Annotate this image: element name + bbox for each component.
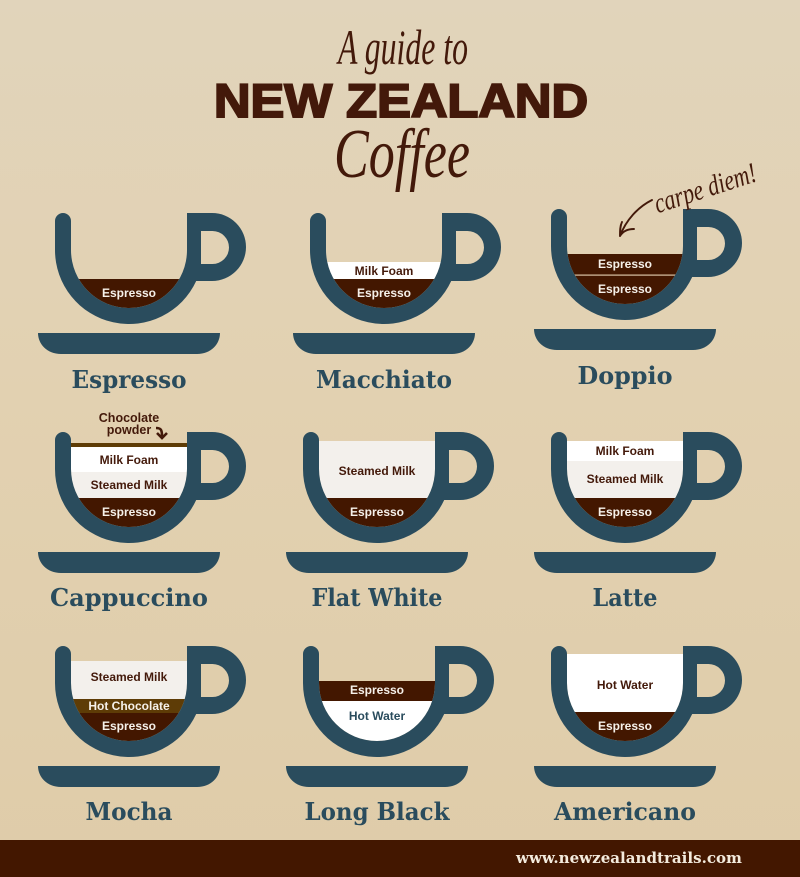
cup bbox=[551, 646, 742, 757]
cup bbox=[303, 432, 494, 543]
liquid layers bbox=[69, 443, 189, 530]
title script line: A guide to: A guide to bbox=[336, 21, 468, 76]
small arrow bbox=[156, 428, 167, 438]
drink: Long Black bbox=[286, 646, 494, 826]
title script line: Coffee: Coffee bbox=[334, 115, 470, 193]
drink: Latte bbox=[534, 432, 742, 612]
saucer bbox=[534, 552, 716, 573]
liquid layers bbox=[69, 661, 189, 744]
saucer bbox=[286, 766, 468, 787]
liquid layers bbox=[79, 279, 179, 308]
arrow bbox=[620, 200, 652, 236]
layer label: Milk Foam bbox=[355, 264, 413, 278]
cup bbox=[310, 213, 501, 324]
cup bbox=[55, 213, 246, 324]
drink name: Long Black bbox=[304, 797, 451, 826]
layer label: Steamed Milk bbox=[91, 670, 168, 684]
cup bbox=[551, 432, 742, 543]
layer label: Espresso bbox=[598, 719, 652, 733]
layer label: Milk Foam bbox=[596, 444, 654, 458]
drink name: Espresso bbox=[72, 365, 186, 394]
drink name: Americano bbox=[553, 797, 696, 826]
drink: Flat White bbox=[286, 432, 494, 612]
liquid layers bbox=[565, 654, 685, 744]
layer label: Espresso bbox=[350, 505, 404, 519]
saucer bbox=[38, 333, 220, 354]
layer label: Hot Chocolate bbox=[88, 699, 170, 713]
chocolate powder note: powder bbox=[107, 423, 151, 437]
layer label: Espresso bbox=[102, 505, 156, 519]
footer bbox=[0, 840, 800, 877]
drink: Mocha bbox=[38, 646, 246, 826]
title bbox=[214, 21, 588, 193]
saucer bbox=[38, 766, 220, 787]
liquid layers bbox=[317, 681, 437, 744]
footer bar bbox=[0, 840, 800, 877]
drink name: Mocha bbox=[86, 797, 172, 826]
liquid layers bbox=[565, 441, 685, 530]
cup bbox=[55, 432, 246, 543]
layer label: Espresso bbox=[350, 683, 404, 697]
liquid layers bbox=[328, 262, 440, 308]
layer label: Espresso bbox=[598, 282, 652, 296]
liquid layers bbox=[565, 254, 685, 307]
layer label: Milk Foam bbox=[100, 453, 158, 467]
saucer bbox=[286, 552, 468, 573]
drink name: Latte bbox=[592, 583, 658, 612]
layer label: Espresso bbox=[598, 257, 652, 271]
saucer bbox=[38, 552, 220, 573]
saucer bbox=[293, 333, 475, 354]
layer label: Espresso bbox=[102, 719, 156, 733]
layer label: Steamed Milk bbox=[339, 464, 416, 478]
drink: Cappuccino bbox=[38, 411, 246, 612]
layer label: Espresso bbox=[598, 505, 652, 519]
liquid layers bbox=[317, 441, 437, 530]
drink: Americano bbox=[534, 646, 742, 826]
drink name: Cappuccino bbox=[50, 583, 208, 612]
drink: Macchiato bbox=[293, 213, 501, 394]
saucer bbox=[534, 329, 716, 350]
layer label: Espresso bbox=[102, 286, 156, 300]
chocolate powder note bbox=[99, 411, 167, 438]
handwritten note: carpe diem! bbox=[650, 156, 760, 220]
drink: Espresso bbox=[38, 213, 246, 394]
drink: Doppio bbox=[534, 209, 742, 390]
layer label: Hot Water bbox=[597, 678, 653, 692]
layer label: Hot Water bbox=[349, 709, 405, 723]
chocolate powder note: Chocolate bbox=[99, 411, 159, 425]
cup bbox=[303, 646, 494, 757]
drink name: Flat White bbox=[312, 583, 442, 612]
title main line: New Zealand: NEW ZEALAND bbox=[214, 74, 588, 127]
drink name: Doppio bbox=[578, 361, 672, 390]
website url: www.newzealandtrails.com bbox=[515, 849, 742, 867]
cup bbox=[55, 646, 246, 757]
cup bbox=[551, 209, 742, 320]
callout: carpe diem bbox=[620, 156, 760, 236]
drink name: Macchiato bbox=[316, 365, 452, 394]
layer label: Espresso bbox=[357, 286, 411, 300]
saucer bbox=[534, 766, 716, 787]
layer label: Steamed Milk bbox=[587, 472, 664, 486]
layer label: Steamed Milk bbox=[91, 478, 168, 492]
